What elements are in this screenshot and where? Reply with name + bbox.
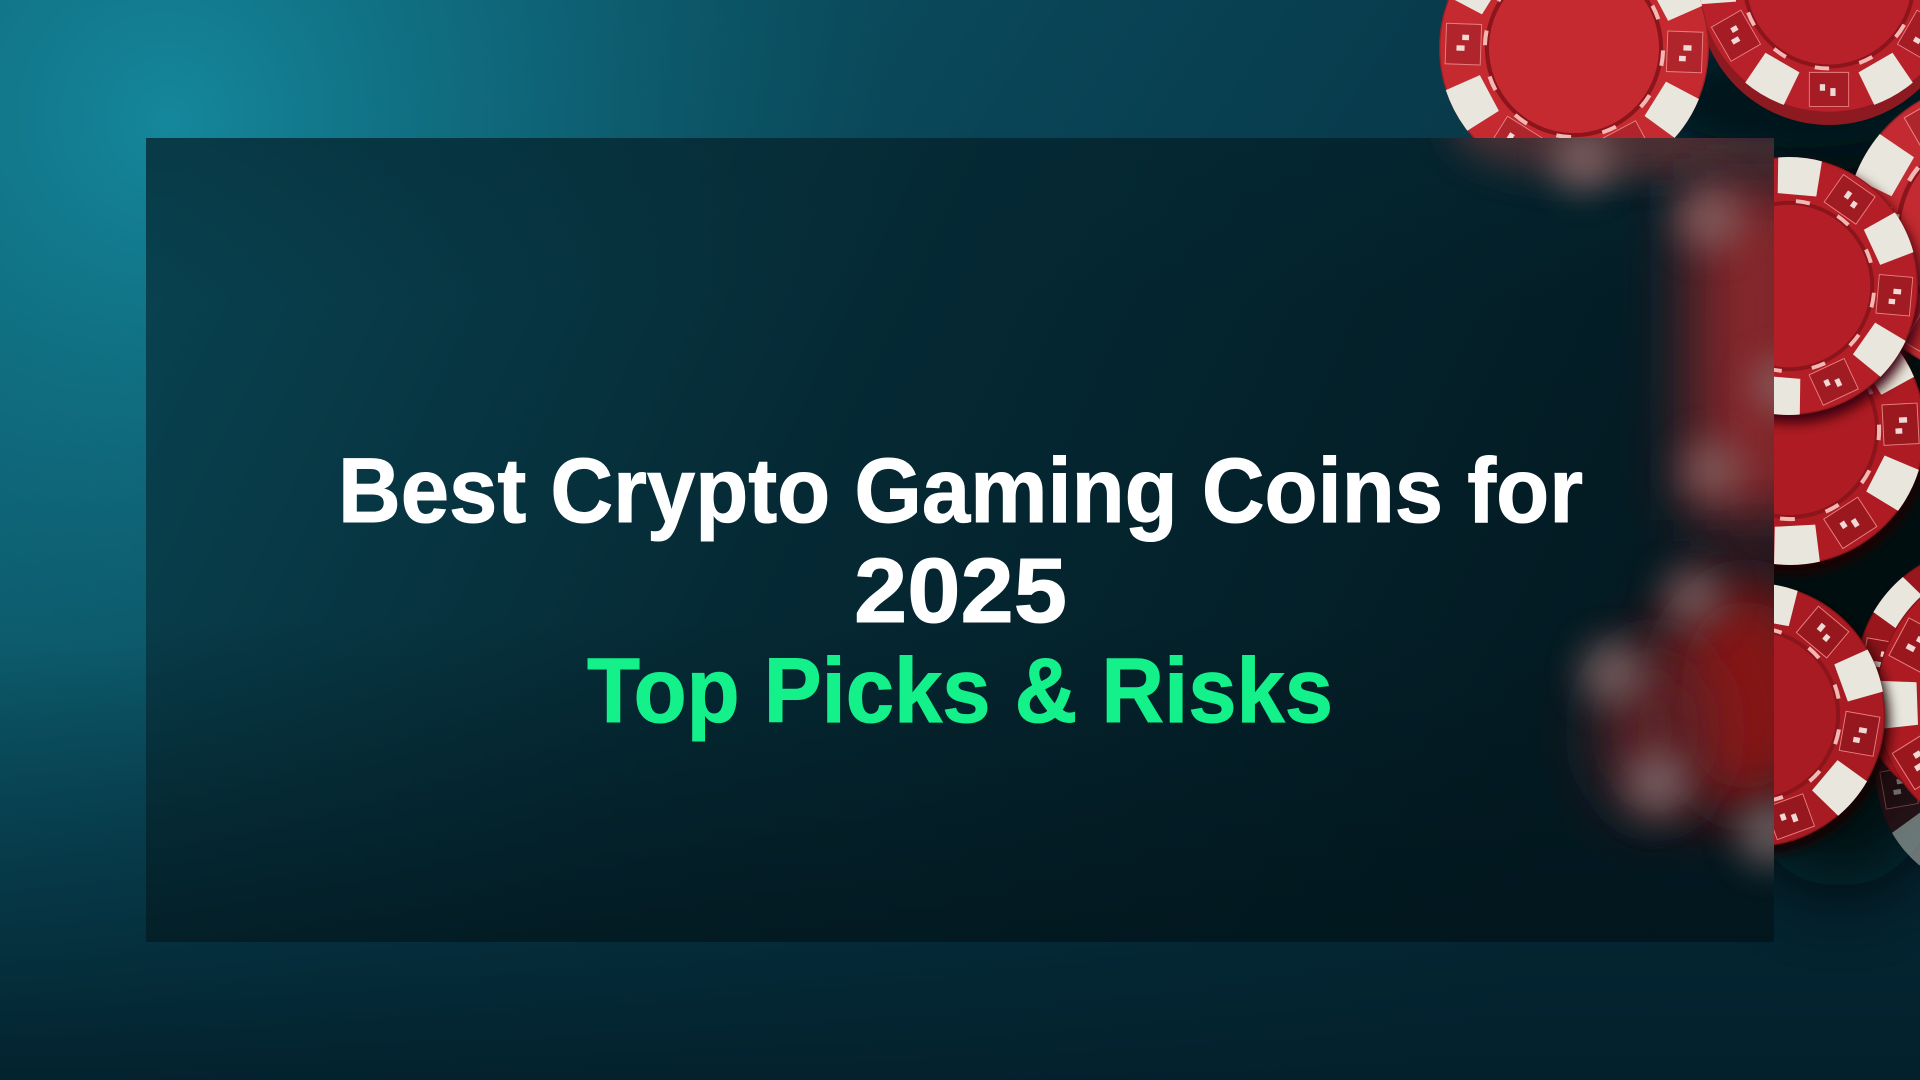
- title line 1: Best Crypto Gaming Coins for: [338, 440, 1583, 542]
- chip: upper right shadow: [1662, 163, 1920, 423]
- chip: middle right shadow: [1656, 302, 1920, 574]
- chip: lower right dark: [1817, 586, 1920, 954]
- chip: far right upper: [1833, 80, 1920, 380]
- chip: top right stack shadow: [1698, 0, 1920, 125]
- chip: right stack back: [1823, 522, 1920, 838]
- frosted panel: [146, 138, 1774, 942]
- chip: top right: [1641, 0, 1920, 166]
- blurred chips behind panel: white blocks: [1553, 130, 1806, 865]
- chip: upper right: [1639, 145, 1920, 427]
- subtitle: top picks and risks: Top Picks & Risks: [587, 640, 1333, 742]
- chip: right stack front: [1816, 503, 1920, 897]
- blurred chips behind panel: red areas: [1438, 138, 1774, 854]
- chip: middle right: [1637, 288, 1920, 572]
- title line 2: 2025: [854, 540, 1067, 642]
- poker chips pile: [1424, 0, 1920, 954]
- chip: lower middle shadow: [1623, 589, 1889, 855]
- chip: top centre: [1424, 0, 1724, 188]
- chip: lower middle: [1590, 560, 1916, 870]
- title: [338, 440, 1583, 742]
